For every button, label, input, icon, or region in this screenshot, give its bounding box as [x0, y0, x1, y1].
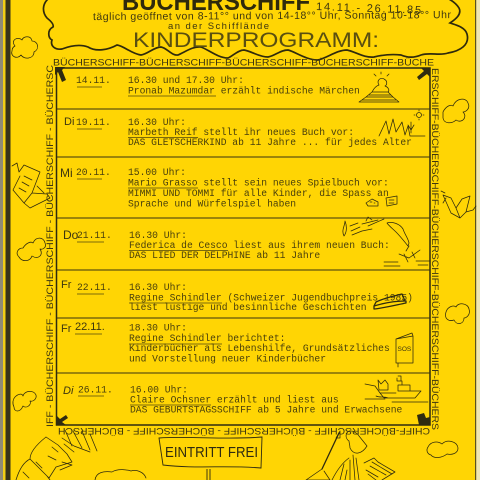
row 5: 22.11. — [61, 279, 413, 313]
row 7: 26.11.: DAS GEBURTSTAGSSCHIFF ab 5 Jahre und Erwachsene — [130, 405, 403, 416]
row 3: 20.11.: 20.11. — [76, 167, 111, 178]
row 2: 19.11.: 16.30 Uhr: — [128, 117, 186, 128]
border text top: BÜCHERSCHIFF-BÜCHERSCHIFF-BÜCHERSCHIFF-BÜCHERSCHIFF-BÜCHE — [53, 58, 434, 68]
row 7: 26.11.: 26.11. — [78, 385, 113, 396]
opening hours: täglich geöffnet von 8-11°° und von 14-18°° Uhr, Sonntag 10-18°° Uhr — [93, 9, 452, 23]
row 3: 20.11.: 15.00 Uhr: — [128, 167, 186, 178]
row 5: 22.11.: 16.30 Uhr: — [129, 282, 187, 293]
row 3: 20.11.: MIMMI UND TOMMI für alle Kinder, die Spass an — [128, 188, 389, 199]
corner arrow bottom left — [57, 415, 68, 425]
row 2: 19.11.: 19.11. — [76, 117, 111, 128]
icon: SOS book — [396, 333, 413, 367]
row 6: 22.11.: Regine Schindler berichtet: — [129, 333, 285, 344]
row 4: 21.11. — [63, 217, 430, 266]
row 6: 22.11.: Kinderbücher als Lebenshilfe, Grundsätzliches — [129, 343, 390, 354]
row 5: 22.11.: 22.11. — [77, 282, 112, 293]
row 2: 19.11. — [64, 110, 425, 148]
row 5: 22.11.: Regine Schindler (Schweizer Jugendbuchpreis 1985) — [129, 293, 413, 304]
border text left: IFF - BÜCHERSCHIFF - BÜCHERSCHIFF - BÜCHERSCHIFF - BÜCHERSC — [45, 65, 56, 427]
border text bottom: CHIFF-BÜCHERSCHIFF - BÜCHERSCHIFF - BÜCHERSCHIFF - BÜCHERSCH — [58, 425, 430, 436]
row 3: 20.11. — [60, 166, 397, 210]
icon: temple — [359, 72, 399, 102]
open book bottom left — [16, 437, 72, 480]
row 5: 22.11.: liest lustige und besinnliche Geschichten — [129, 302, 367, 313]
row 1: 14.11.: 14.11. — [76, 75, 111, 86]
row 6: 22.11. — [61, 321, 413, 367]
corner arrow bottom right — [417, 413, 430, 425]
cloud right lower — [427, 441, 458, 458]
icon: closed book — [374, 294, 406, 309]
row 1: 14.11.: 16.30 und 17.30 Uhr: — [128, 75, 244, 86]
row 3: 20.11.: Mario Grasso stellt sein neues Spielbuch vor: — [128, 178, 389, 189]
header cloud outline — [43, 0, 468, 60]
row 4: 21.11.: Do — [63, 228, 79, 242]
dates: 14.11.- 26.11.85 — [316, 1, 421, 17]
row 1: 14.11.: Pronab Mazumdar erzählt indische Märchen — [128, 85, 360, 96]
cloud right middle — [445, 304, 469, 324]
row 2: 19.11.: DAS GLETSCHERKIND ab 11 Jahre ... für jedes Alter — [128, 137, 412, 148]
row 6: 22.11.: Fr — [61, 323, 72, 335]
corner arrow top right — [417, 68, 430, 80]
row 6: 22.11.: und Vorstellung neuer Kinderbücher — [129, 354, 326, 365]
row 7: 26.11.: Di — [63, 385, 74, 397]
paper edge left — [0, 0, 10, 480]
cloud bottom centre — [95, 470, 146, 480]
row 3: 20.11.: Sprache und Würfelspiel haben — [128, 199, 296, 210]
icon: mountains and sun — [379, 110, 425, 136]
programme heading: KINDERPROGRAMM: — [133, 29, 379, 52]
figure reading with pen — [306, 431, 395, 480]
row 1: 14.11. — [76, 72, 399, 102]
border text right: ERSCHIFF-BÜCHERSCHIFF-BÜCHERSCHIFF-BÜCHERSCHIFF-BÜCHERS — [429, 68, 440, 430]
row 6: 22.11.: 22.11. — [75, 321, 105, 333]
row 4: 21.11.: 21.11. — [77, 230, 112, 241]
row 4: 21.11.: Federica de Cesco liest aus ihrem neuen Buch: — [129, 240, 390, 251]
location: an der Schifflände — [168, 21, 269, 32]
paper edge right — [475, 0, 480, 480]
row 2: 19.11.: Marbeth Reif stellt ihr neues Buch vor: — [128, 127, 354, 138]
icon: dice — [366, 196, 397, 206]
icon: ship — [365, 376, 428, 402]
cloud left — [17, 238, 46, 261]
icon: music and dolphin — [343, 217, 430, 266]
programme table frame — [56, 68, 430, 425]
row 7: 26.11.: Claire Ochsner erzählt und liest aus — [130, 395, 339, 406]
row 5: 22.11.: Fr — [61, 279, 72, 291]
open book right — [441, 191, 476, 218]
row 6: 22.11.: 18.30 Uhr: — [129, 323, 187, 334]
row 4: 21.11.: DAS LIED DER DELPHINE ab 11 Jahre — [129, 250, 320, 261]
cloud left lower — [13, 391, 36, 411]
sign: entry free: EINTRITT FREI — [165, 444, 258, 461]
row 7: 26.11. — [63, 376, 428, 416]
open book left — [12, 163, 50, 208]
row 7: 26.11.: 16.00 Uhr: — [130, 385, 188, 396]
fern leaves — [62, 430, 97, 452]
cloud top left — [12, 37, 38, 58]
row 2: 19.11.: Di — [64, 116, 74, 128]
sign: entry free — [159, 437, 262, 480]
icon: SOS book: SOS — [398, 346, 412, 353]
cloud right upper — [443, 99, 469, 123]
corner arrow top left — [55, 67, 66, 82]
row 3: 20.11.: Mi — [60, 166, 73, 180]
row 4: 21.11.: 16.30 Uhr: — [129, 230, 187, 241]
